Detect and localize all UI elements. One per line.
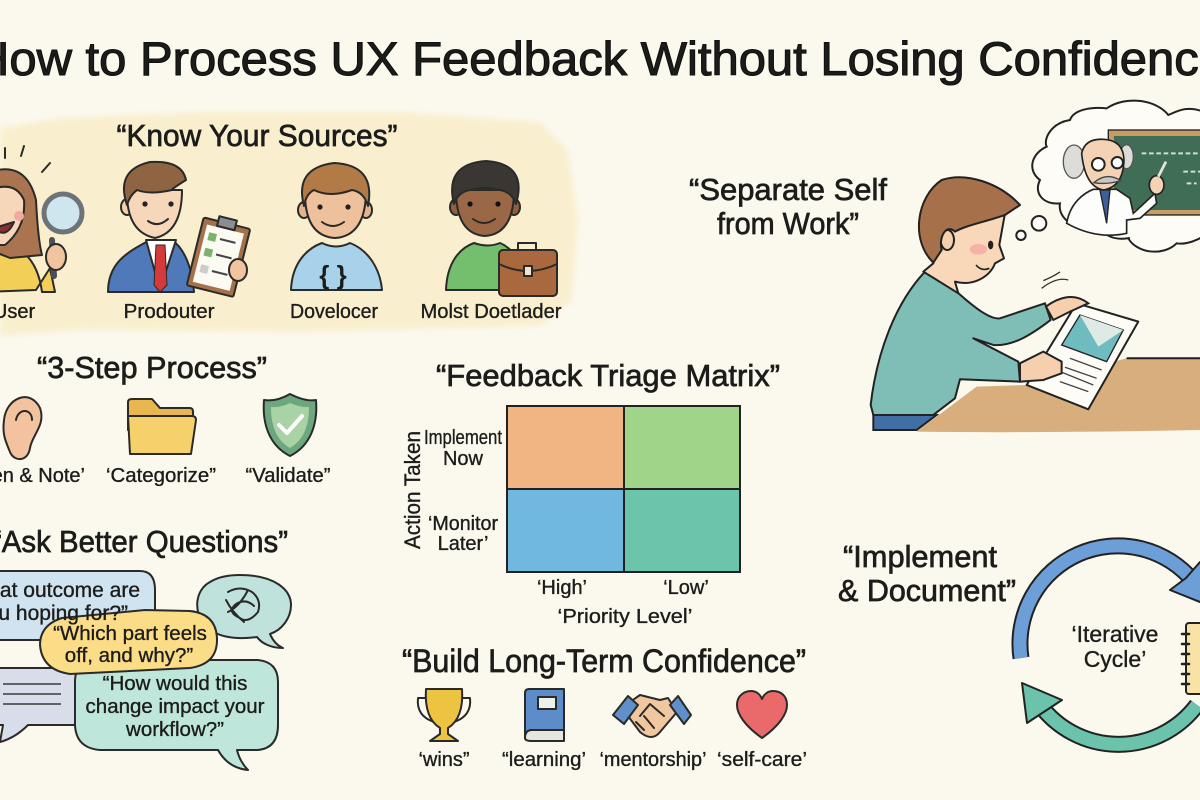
- cycle label: ‘Iterative: [1072, 621, 1158, 647]
- heading: 3-step process: “3-Step Process”: [37, 350, 267, 385]
- source labels: [0, 301, 562, 323]
- panel: feedback triage matrix: [400, 358, 780, 628]
- pants: [873, 407, 937, 430]
- y axis title: Action Taken: [400, 431, 425, 549]
- y axis labels: ‘Monitor: [428, 513, 498, 535]
- x axis labels: ‘Low’: [663, 577, 709, 599]
- panel: know your sources: [0, 112, 578, 336]
- heading: implement and document: “Implement: [843, 539, 997, 574]
- step labels: ‘Categorize”: [106, 465, 216, 487]
- x axis labels: ‘Priority Level’: [558, 606, 692, 628]
- step labels: “Validate”: [246, 465, 330, 487]
- confidence labels: ‘mentorship’: [600, 749, 706, 771]
- blackboard: [1108, 130, 1200, 215]
- torso and arms: [871, 272, 1051, 415]
- y axis labels: Implement: [424, 427, 502, 449]
- heading: ask better questions: “Ask Better Questions”: [0, 524, 288, 559]
- x axis labels: ‘High’: [537, 577, 587, 599]
- heading: build long-term confidence: “Build Long-Term Confidence”: [402, 643, 806, 679]
- cycle label: Cycle’: [1084, 646, 1146, 672]
- heading second line: from Work”: [717, 206, 859, 241]
- character: most downloader with briefcase: [446, 161, 557, 296]
- head and face: [923, 208, 1005, 293]
- arrow: blue top: [1020, 546, 1200, 658]
- confidence labels: ‘wins”: [418, 749, 470, 771]
- heading: feedback triage matrix: “Feedback Triage Matrix”: [436, 358, 780, 393]
- bubble: which part question: off, and why?”: [65, 644, 193, 667]
- icon: notebook: [1182, 623, 1200, 694]
- icon: book: [525, 689, 564, 741]
- icon: trophy: [418, 689, 470, 741]
- heading: know your sources: “Know Your Sources”: [116, 118, 398, 153]
- confidence labels: ‘self-care’: [717, 749, 807, 771]
- step labels: [0, 465, 330, 487]
- y axis labels: Now: [443, 448, 484, 470]
- icon: shield with check: [264, 394, 316, 456]
- thought bubble: [1016, 101, 1200, 252]
- bubble: outcome question shape: [0, 571, 155, 640]
- panel: separate self from work: [689, 101, 1200, 432]
- icon: heart: [737, 691, 787, 738]
- y axis labels: Later’: [438, 533, 488, 555]
- title: How to Process UX Feedback Without Losing Confidence: [0, 32, 1200, 85]
- panel: ask better questions: [0, 524, 291, 770]
- source labels: Molst Doetlader: [420, 301, 562, 323]
- cycle diagram: [1020, 546, 1200, 744]
- heading: separate self from work: “Separate Self: [689, 172, 887, 207]
- arrow: green bottom: [1022, 683, 1197, 744]
- outcome question text: [0, 579, 140, 625]
- confidence labels: [418, 749, 807, 771]
- character: developer: { }: [319, 260, 347, 290]
- panel: 3-step process: [0, 350, 330, 487]
- bubble: which part question: “Which part feels: [53, 622, 207, 645]
- matrix grid: [507, 406, 740, 572]
- paper: [1027, 303, 1138, 409]
- icon: handshake: [613, 695, 691, 737]
- character: developer: [291, 163, 382, 290]
- professor: [1063, 139, 1166, 235]
- panel: implement and document: [838, 539, 1200, 744]
- y axis labels: [424, 427, 502, 555]
- cycle label: [1072, 621, 1158, 672]
- bubble: impact question: change impact your: [86, 695, 265, 718]
- bubble: impact question: “How would this: [103, 672, 247, 695]
- illustration: person reviewing work with thought bubble: [871, 101, 1200, 432]
- source labels: Prodouter: [124, 301, 215, 323]
- icon: ear: [3, 397, 41, 459]
- character: user with magnifier: [0, 146, 82, 292]
- confidence labels: “learning’: [502, 749, 586, 771]
- x axis labels: [537, 577, 709, 628]
- character: product owner with clipboard: [108, 162, 251, 297]
- panel background wash: [0, 112, 578, 336]
- icon: folder: [128, 399, 196, 454]
- heading second line: & Document”: [838, 573, 1016, 608]
- bubble: scribble icon: [197, 575, 291, 648]
- bubble: impact question: [75, 660, 278, 770]
- hands: [1046, 297, 1088, 320]
- source labels: Dovelocer: [290, 301, 378, 323]
- hair: [919, 177, 1020, 263]
- table: [917, 358, 1200, 432]
- bubble: gray lines: [0, 668, 80, 742]
- bubble: impact question: workflow?”: [125, 718, 224, 741]
- bubble: which part question: [40, 610, 217, 674]
- panel: build long-term confidence: [402, 643, 807, 771]
